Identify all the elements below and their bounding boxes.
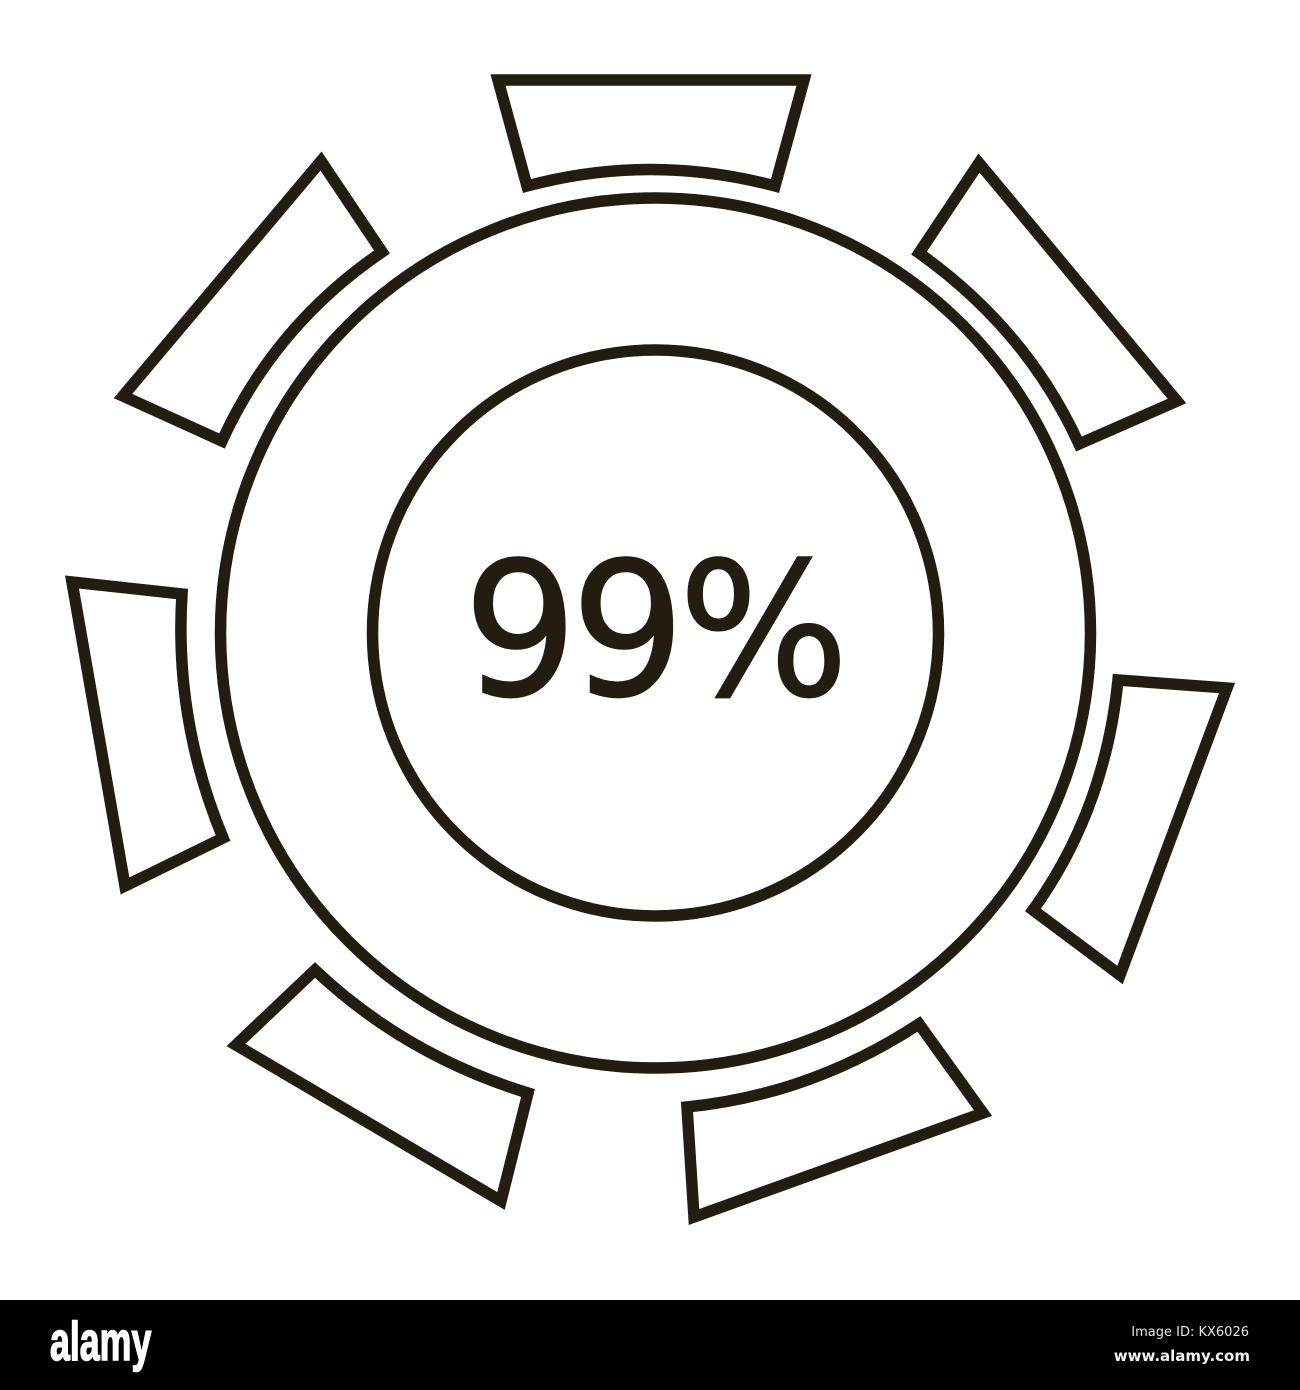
- logo text: alamy: [50, 1310, 152, 1372]
- outer ring: [220, 198, 1090, 1068]
- segment: top: [498, 80, 804, 186]
- segment: bottom left: [236, 970, 528, 1201]
- footer bar: [0, 1300, 1300, 1390]
- percentage label: 99%: [463, 523, 842, 740]
- segment: upper right: [919, 163, 1177, 444]
- inner circle: [372, 350, 938, 916]
- segment: left: [72, 582, 223, 886]
- image id: Image ID: KX6026: [1131, 1325, 1249, 1340]
- segment: upper left: [123, 161, 382, 441]
- website: www.alamy.com: [1114, 1347, 1250, 1365]
- segment: bottom right: [687, 1024, 983, 1217]
- segment: right: [1033, 680, 1227, 975]
